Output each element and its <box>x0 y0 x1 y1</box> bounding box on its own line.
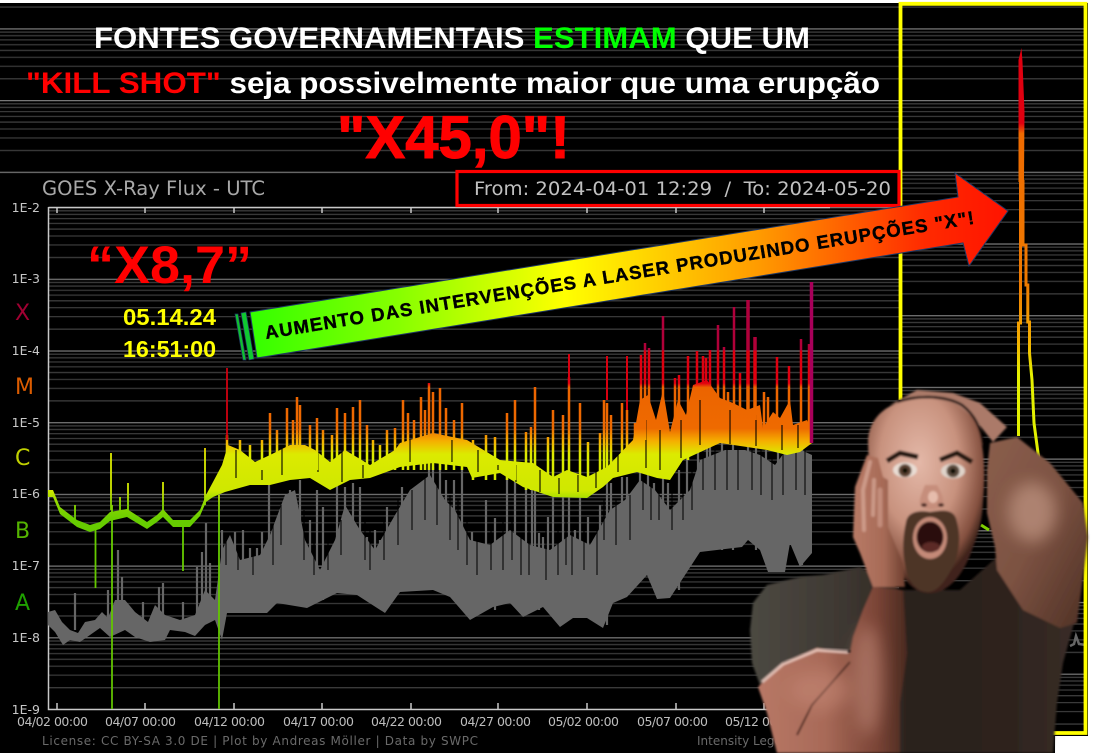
flare class labels <box>15 301 34 616</box>
right panel: projected X45 flare <box>900 3 1086 734</box>
y axis labels: 1E-4 <box>12 343 40 358</box>
hand on head <box>890 390 1007 442</box>
x axis date labels: 04/27 00:00 <box>460 714 531 729</box>
nose <box>920 485 944 509</box>
right eye and brow <box>940 453 972 478</box>
arrow: rising laser interventions <box>235 173 1008 360</box>
current flare callout: 05.14.24 <box>123 304 216 330</box>
title: "KILL SHOT" seja possivelmente maior que uma erupção <box>26 67 880 100</box>
x axis date labels: 04/12 00:00 <box>194 714 265 729</box>
yellow highlight frame <box>900 4 1086 733</box>
flare tail fragments <box>981 525 989 530</box>
y axis labels: 1E-8 <box>12 630 40 645</box>
x axis date labels: 05/12 00:00 <box>725 714 796 729</box>
hand on cheek <box>853 455 905 587</box>
current flare callout: 16:51:00 <box>123 336 216 362</box>
flare class labels: B <box>15 519 30 544</box>
shirt <box>750 557 1080 753</box>
arrow: rising laser interventions: AUMENTO DAS INTERVENÇÕES A LASER PRODUZINDO ERUPÇÕES "X"! <box>263 207 975 343</box>
header grid lines <box>0 3 900 174</box>
forearm <box>758 587 907 753</box>
date range box <box>457 172 899 206</box>
license footer <box>42 734 797 748</box>
x axis date labels: 04/22 00:00 <box>371 714 442 729</box>
axis frame and ticks <box>48 207 830 710</box>
x axis date labels: 05/07 00:00 <box>637 714 708 729</box>
left eye and brow <box>887 453 918 478</box>
x axis date labels: 04/02 00:00 <box>17 714 88 729</box>
y axis labels: 1E-3 <box>12 271 40 286</box>
title: FONTES GOVERNAMENTAIS ESTIMAM QUE UM <box>94 22 810 55</box>
y axis labels: 1E-9 <box>12 702 40 717</box>
flare class labels: M <box>15 375 34 400</box>
current flare callout <box>87 236 252 362</box>
title <box>26 22 880 171</box>
x axis date labels: 04/07 00:00 <box>105 714 176 729</box>
license footer: Intensity Legend <box>697 734 797 748</box>
x axis date labels: 05/02 00:00 <box>548 714 619 729</box>
y axis labels: 1E-2 <box>12 200 40 215</box>
title: "X45,0"! <box>337 104 570 171</box>
y axis labels: 1E-6 <box>12 486 40 501</box>
x axis date labels <box>17 714 796 729</box>
beard <box>903 511 959 592</box>
shocked man <box>750 390 1088 753</box>
projected flare spike <box>1018 48 1041 470</box>
head <box>868 398 984 593</box>
mouth <box>913 517 947 559</box>
flare class labels: A <box>15 591 30 616</box>
bottom right page corner <box>1055 736 1100 753</box>
flare flux band with spikes <box>48 282 812 709</box>
chart title: GOES X-Ray Flux - UTC <box>42 177 265 200</box>
chart panel: GOES X-ray flux <box>12 177 899 748</box>
y axis labels <box>12 200 40 717</box>
current flare callout: “X8,7” <box>87 236 252 295</box>
y axis labels: 1E-7 <box>12 558 40 573</box>
date range box: From: 2024-04-01 12:29 / To: 2024-05-20 <box>474 178 891 200</box>
flare class labels: X <box>15 301 30 326</box>
license footer: License: CC BY-SA 3.0 DE | Plot by Andreas Möller | Data by SWPC <box>42 734 478 748</box>
x axis date labels: 04/17 00:00 <box>283 714 354 729</box>
gray short-wavelength flux series <box>48 405 812 645</box>
flare class labels: C <box>15 446 30 471</box>
y axis labels: 1E-5 <box>12 415 40 430</box>
raised arm <box>987 437 1088 628</box>
